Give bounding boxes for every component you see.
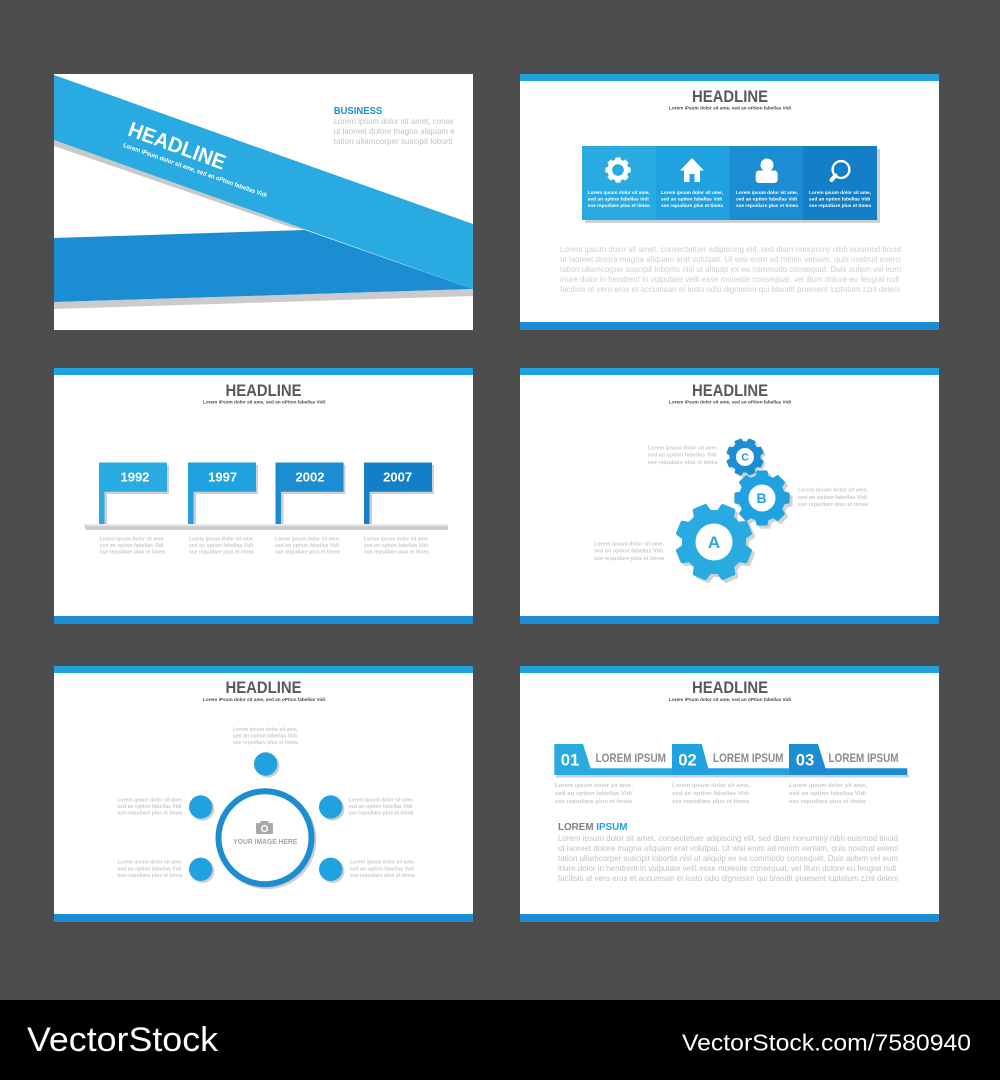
caption 01: Lorem ipsum dolor sit ame, xyxy=(555,783,634,789)
caption lower left xyxy=(118,860,183,879)
caption 1992 xyxy=(100,536,165,556)
headline: HEADLINE xyxy=(226,679,302,697)
subtitle: Lorem iPsum dolor sit ame, sed an oPtion fabellas Vidi xyxy=(203,400,325,406)
caption lower right: Lorem ipsum dolor sit ame, xyxy=(350,860,416,866)
image placeholder label: YOUR IMAGE HERE xyxy=(233,837,297,846)
gear C xyxy=(722,434,768,480)
caption 1997: Lorem ipsum dolor sit ame, xyxy=(189,536,255,542)
caption upper left xyxy=(118,798,183,816)
cover subtitle: Lorem iPsum dolor sit ame, sed an oPtion fabellas Vidi xyxy=(122,142,268,199)
caption 01: sse repudiare plus et timea xyxy=(555,799,632,805)
subtitle: Lorem iPsum dolor sit ame, sed an oPtion fabellas Vidi xyxy=(669,106,791,112)
body paragraph xyxy=(560,244,901,294)
caption 02: Lorem ipsum dolor sit ame, xyxy=(672,783,751,789)
body paragraph xyxy=(558,833,898,883)
brand name: VectorStock xyxy=(27,1021,219,1059)
caption A xyxy=(594,542,665,562)
caption upper right: sed an option fabellas Vidi xyxy=(348,804,413,810)
panel: cover slide xyxy=(54,74,473,330)
gear B: B xyxy=(756,490,767,506)
body paragraph: tation ullamcorper suscipit lobortis nisl ut aliquip ex ea commodo consequat. Duis autem vel eum xyxy=(560,264,901,274)
caption 2002 xyxy=(275,536,341,556)
caption C: sed an option fabellas Vidi xyxy=(648,452,717,458)
caption top xyxy=(233,727,299,746)
tab 01: LOREM IPSUM xyxy=(596,753,666,765)
flag 2002: 2002 xyxy=(296,470,324,484)
feature cell 4 xyxy=(803,146,877,220)
caption C: sse repudiare plus et timea xyxy=(648,460,718,466)
caption 1992: sse repudiare plus et timea xyxy=(100,550,165,556)
icon: person xyxy=(756,158,778,183)
caption lower right: sse repudiare plus et timea xyxy=(350,873,415,879)
caption upper left: sed an option fabellas Vidi xyxy=(118,804,182,810)
caption upper left: sse repudiare plus et timea xyxy=(118,810,183,816)
dark blue band xyxy=(54,230,473,302)
feature cell 2 xyxy=(656,146,730,220)
subtitle: Lorem iPsum dolor sit ame, sed an oPtion fabellas Vidi xyxy=(669,400,791,406)
business text: Lorem ipsum dolor sit amet, conse xyxy=(334,116,454,126)
headline: HEADLINE xyxy=(692,88,768,106)
business text: ut laoreet dolore magna aliquam e xyxy=(334,126,455,136)
caption upper right: Lorem ipsum dolor sit ame, xyxy=(348,798,414,804)
caption B: sse repudiare plus et timea xyxy=(798,502,868,508)
caption upper right: sse repudiare plus et timea xyxy=(348,810,414,816)
icon: camera xyxy=(256,821,273,834)
caption upper right xyxy=(348,798,414,816)
body paragraph: iriure dolor in hendrerit in vulputate velit esse molestie consequat, vel illum dolore eu feugiat null xyxy=(560,274,899,284)
business heading: BUSINESS xyxy=(334,106,383,117)
caption lower left: sed an option fabellas Vidi xyxy=(118,866,182,872)
caption 2007: sse repudiare plus et timea xyxy=(364,550,429,556)
feature cell 1 xyxy=(582,146,656,220)
feature cell 2: sed an option fabellas Vidi xyxy=(661,196,722,202)
caption 03: sed an option fabellas Vidi xyxy=(789,791,867,797)
tab 01 xyxy=(554,744,672,775)
gear B xyxy=(736,472,788,524)
headline: HEADLINE xyxy=(692,382,768,400)
caption lower left: sse repudiare plus et timea xyxy=(118,873,183,879)
dot upper left xyxy=(189,795,214,821)
watermark footer bar xyxy=(0,1000,1000,1080)
dot upper right xyxy=(319,795,344,821)
caption A: sse repudiare plus et timea xyxy=(594,556,664,562)
caption 1997: sse repudiare plus et timea xyxy=(189,550,254,556)
caption 01 xyxy=(555,783,634,805)
tab 02 xyxy=(672,744,789,775)
caption lower left: Lorem ipsum dolor sit ame, xyxy=(118,860,183,866)
caption upper left: Lorem ipsum dolor sit ame, xyxy=(118,798,183,804)
caption 2002: sse repudiare plus et timea xyxy=(275,550,340,556)
tab 01: 01 xyxy=(561,752,579,770)
flag 2007 xyxy=(364,462,434,524)
caption B: sed an option fabellas Vidi xyxy=(798,495,868,501)
business text: tation ullamcorper suscipit loborti xyxy=(334,136,453,146)
feature cell 3: sse repudiare plus et timea xyxy=(736,203,798,209)
headline: HEADLINE xyxy=(692,679,768,697)
headline: HEADLINE xyxy=(226,382,302,400)
body paragraph: ut laoreet dolore magna aliquam erat volutpat. Ut wisi enim ad minim veniam, quis nostrud exerci xyxy=(558,843,898,853)
caption 1992: sed an option fabellas Vidi xyxy=(100,543,164,549)
feature cell 2: Lorem ipsum dolor sit ame, xyxy=(661,190,724,196)
caption B: Lorem ipsum dolor sit ame, xyxy=(798,488,869,494)
caption lower right: sed an option fabellas Vidi xyxy=(350,866,415,872)
tab 03 xyxy=(789,744,907,775)
image id: VectorStock.com/7580940 xyxy=(682,1030,971,1056)
lorem ipsum heading: LOREM IPSUM xyxy=(558,821,628,833)
feature cell 2: sse repudiare plus et timea xyxy=(661,203,723,209)
dot lower right xyxy=(319,858,344,883)
body paragraph: facilisis at vero eros et accumsan et iusto odio dignissim qui blandit praesent luptatum zzril deleni xyxy=(560,284,900,294)
caption lower right xyxy=(350,860,416,879)
flag 2007: 2007 xyxy=(383,470,412,484)
caption 1997: sed an option fabellas Vidi xyxy=(189,543,254,549)
flag 1992 xyxy=(99,462,169,524)
icon: gear xyxy=(606,158,630,182)
panel: circle diagram slide xyxy=(54,666,473,922)
dot top xyxy=(254,752,279,778)
tab 02: LOREM IPSUM xyxy=(713,753,784,765)
caption 2007 xyxy=(364,536,430,556)
gear C: C xyxy=(741,452,749,464)
body paragraph: iriure dolor in hendrerit in vulputate velit esse molestie consequat, vel illum dolore eu feugiat null xyxy=(558,863,896,873)
subtitle: Lorem iPsum dolor sit ame, sed an oPtion fabellas Vidi xyxy=(669,697,791,703)
caption C: Lorem ipsum dolor sit ame, xyxy=(648,446,718,452)
tab 02: 02 xyxy=(678,752,697,770)
caption 03: Lorem ipsum dolor sit ame, xyxy=(789,783,868,789)
caption C xyxy=(648,446,718,466)
dot lower left xyxy=(189,858,214,883)
central image ring xyxy=(218,790,316,889)
subtitle: Lorem iPsum dolor sit ame, sed an oPtion fabellas Vidi xyxy=(203,697,325,703)
flag 1997: 1997 xyxy=(208,470,237,484)
caption 2002: Lorem ipsum dolor sit ame, xyxy=(275,536,341,542)
caption 1997 xyxy=(189,536,255,556)
caption 1992: Lorem ipsum dolor sit ame, xyxy=(100,536,165,542)
caption 2007: Lorem ipsum dolor sit ame, xyxy=(364,536,430,542)
body paragraph: Lorem ipsum dolor sit amet, consectetuer adipiscing elit, sed diam nonummy nibh euismod tincid xyxy=(560,244,901,254)
timeline base xyxy=(84,524,448,530)
feature cell 1: Lorem ipsum dolor sit ame, xyxy=(588,190,650,196)
feature cell 4: Lorem ipsum dolor sit ame, xyxy=(809,190,872,196)
cover headline: HEADLINE xyxy=(125,118,229,175)
body paragraph: tation ullamcorper suscipit lobortis nisl ut aliquip ex ea commodo consequat. Duis autem vel eum xyxy=(558,853,898,863)
body paragraph: Lorem ipsum dolor sit amet, consectetuer adipiscing elit, sed diam nonummy nibh euismod tincid xyxy=(558,833,898,843)
gear A xyxy=(666,494,762,590)
body paragraph: ut laoreet dolore magna aliquam erat volutpat. Ut wisi enim ad minim veniam, quis nostrud exerci xyxy=(560,254,901,264)
feature cell 3: Lorem ipsum dolor sit ame, xyxy=(736,190,799,196)
light blue diagonal band xyxy=(54,75,473,289)
panel: icon strip slide xyxy=(520,74,939,330)
caption 03 xyxy=(789,783,868,805)
caption A: sed an option fabellas Vidi xyxy=(594,548,664,554)
caption top: Lorem ipsum dolor sit ame, xyxy=(233,727,299,733)
icon: house xyxy=(680,158,704,182)
flag 1997 xyxy=(188,462,258,524)
tab strip shadow xyxy=(556,775,909,778)
caption top: sse repudiare plus et timea xyxy=(233,740,298,746)
caption 02: sse repudiare plus et timea xyxy=(672,799,749,805)
feature cell 3: sed an option fabellas Vidi xyxy=(736,196,797,202)
tab 03: 03 xyxy=(796,752,814,770)
caption A: Lorem ipsum dolor sit ame, xyxy=(594,542,665,548)
body paragraph: facilisis at vero eros et accumsan et iusto odio dignissim qui blandit praesent luptatum zzril deleni xyxy=(558,873,898,883)
icon: magnifier xyxy=(832,161,849,180)
feature cell 3 xyxy=(730,146,804,220)
tab 03: LOREM IPSUM xyxy=(828,753,898,765)
caption 02 xyxy=(672,783,751,805)
panel: gears slide xyxy=(520,368,939,624)
caption top: sed an option fabellas Vidi xyxy=(233,734,298,740)
panel: timeline slide xyxy=(54,368,473,624)
caption 2002: sed an option fabellas Vidi xyxy=(275,543,340,549)
panel: numbered tabs slide xyxy=(520,666,939,922)
feature cell 1: sed an option fabellas Vidi xyxy=(588,196,649,202)
caption 01: sed an option fabellas Vidi xyxy=(555,791,633,797)
gear shadows xyxy=(669,436,791,593)
caption B xyxy=(798,488,869,508)
flag 1992: 1992 xyxy=(120,470,150,484)
gear A: A xyxy=(708,533,720,552)
caption 03: sse repudiare plus et timea xyxy=(789,799,866,805)
business text xyxy=(334,116,455,146)
feature cell 4: sse repudiare plus et timea xyxy=(809,203,871,209)
caption 02: sed an option fabellas Vidi xyxy=(672,791,750,797)
flag 2002 xyxy=(276,462,346,524)
caption 2007: sed an option fabellas Vidi xyxy=(364,543,429,549)
feature cell 4: sed an option fabellas Vidi xyxy=(809,196,870,202)
feature cell 1: sse repudiare plus et timea xyxy=(588,203,650,209)
